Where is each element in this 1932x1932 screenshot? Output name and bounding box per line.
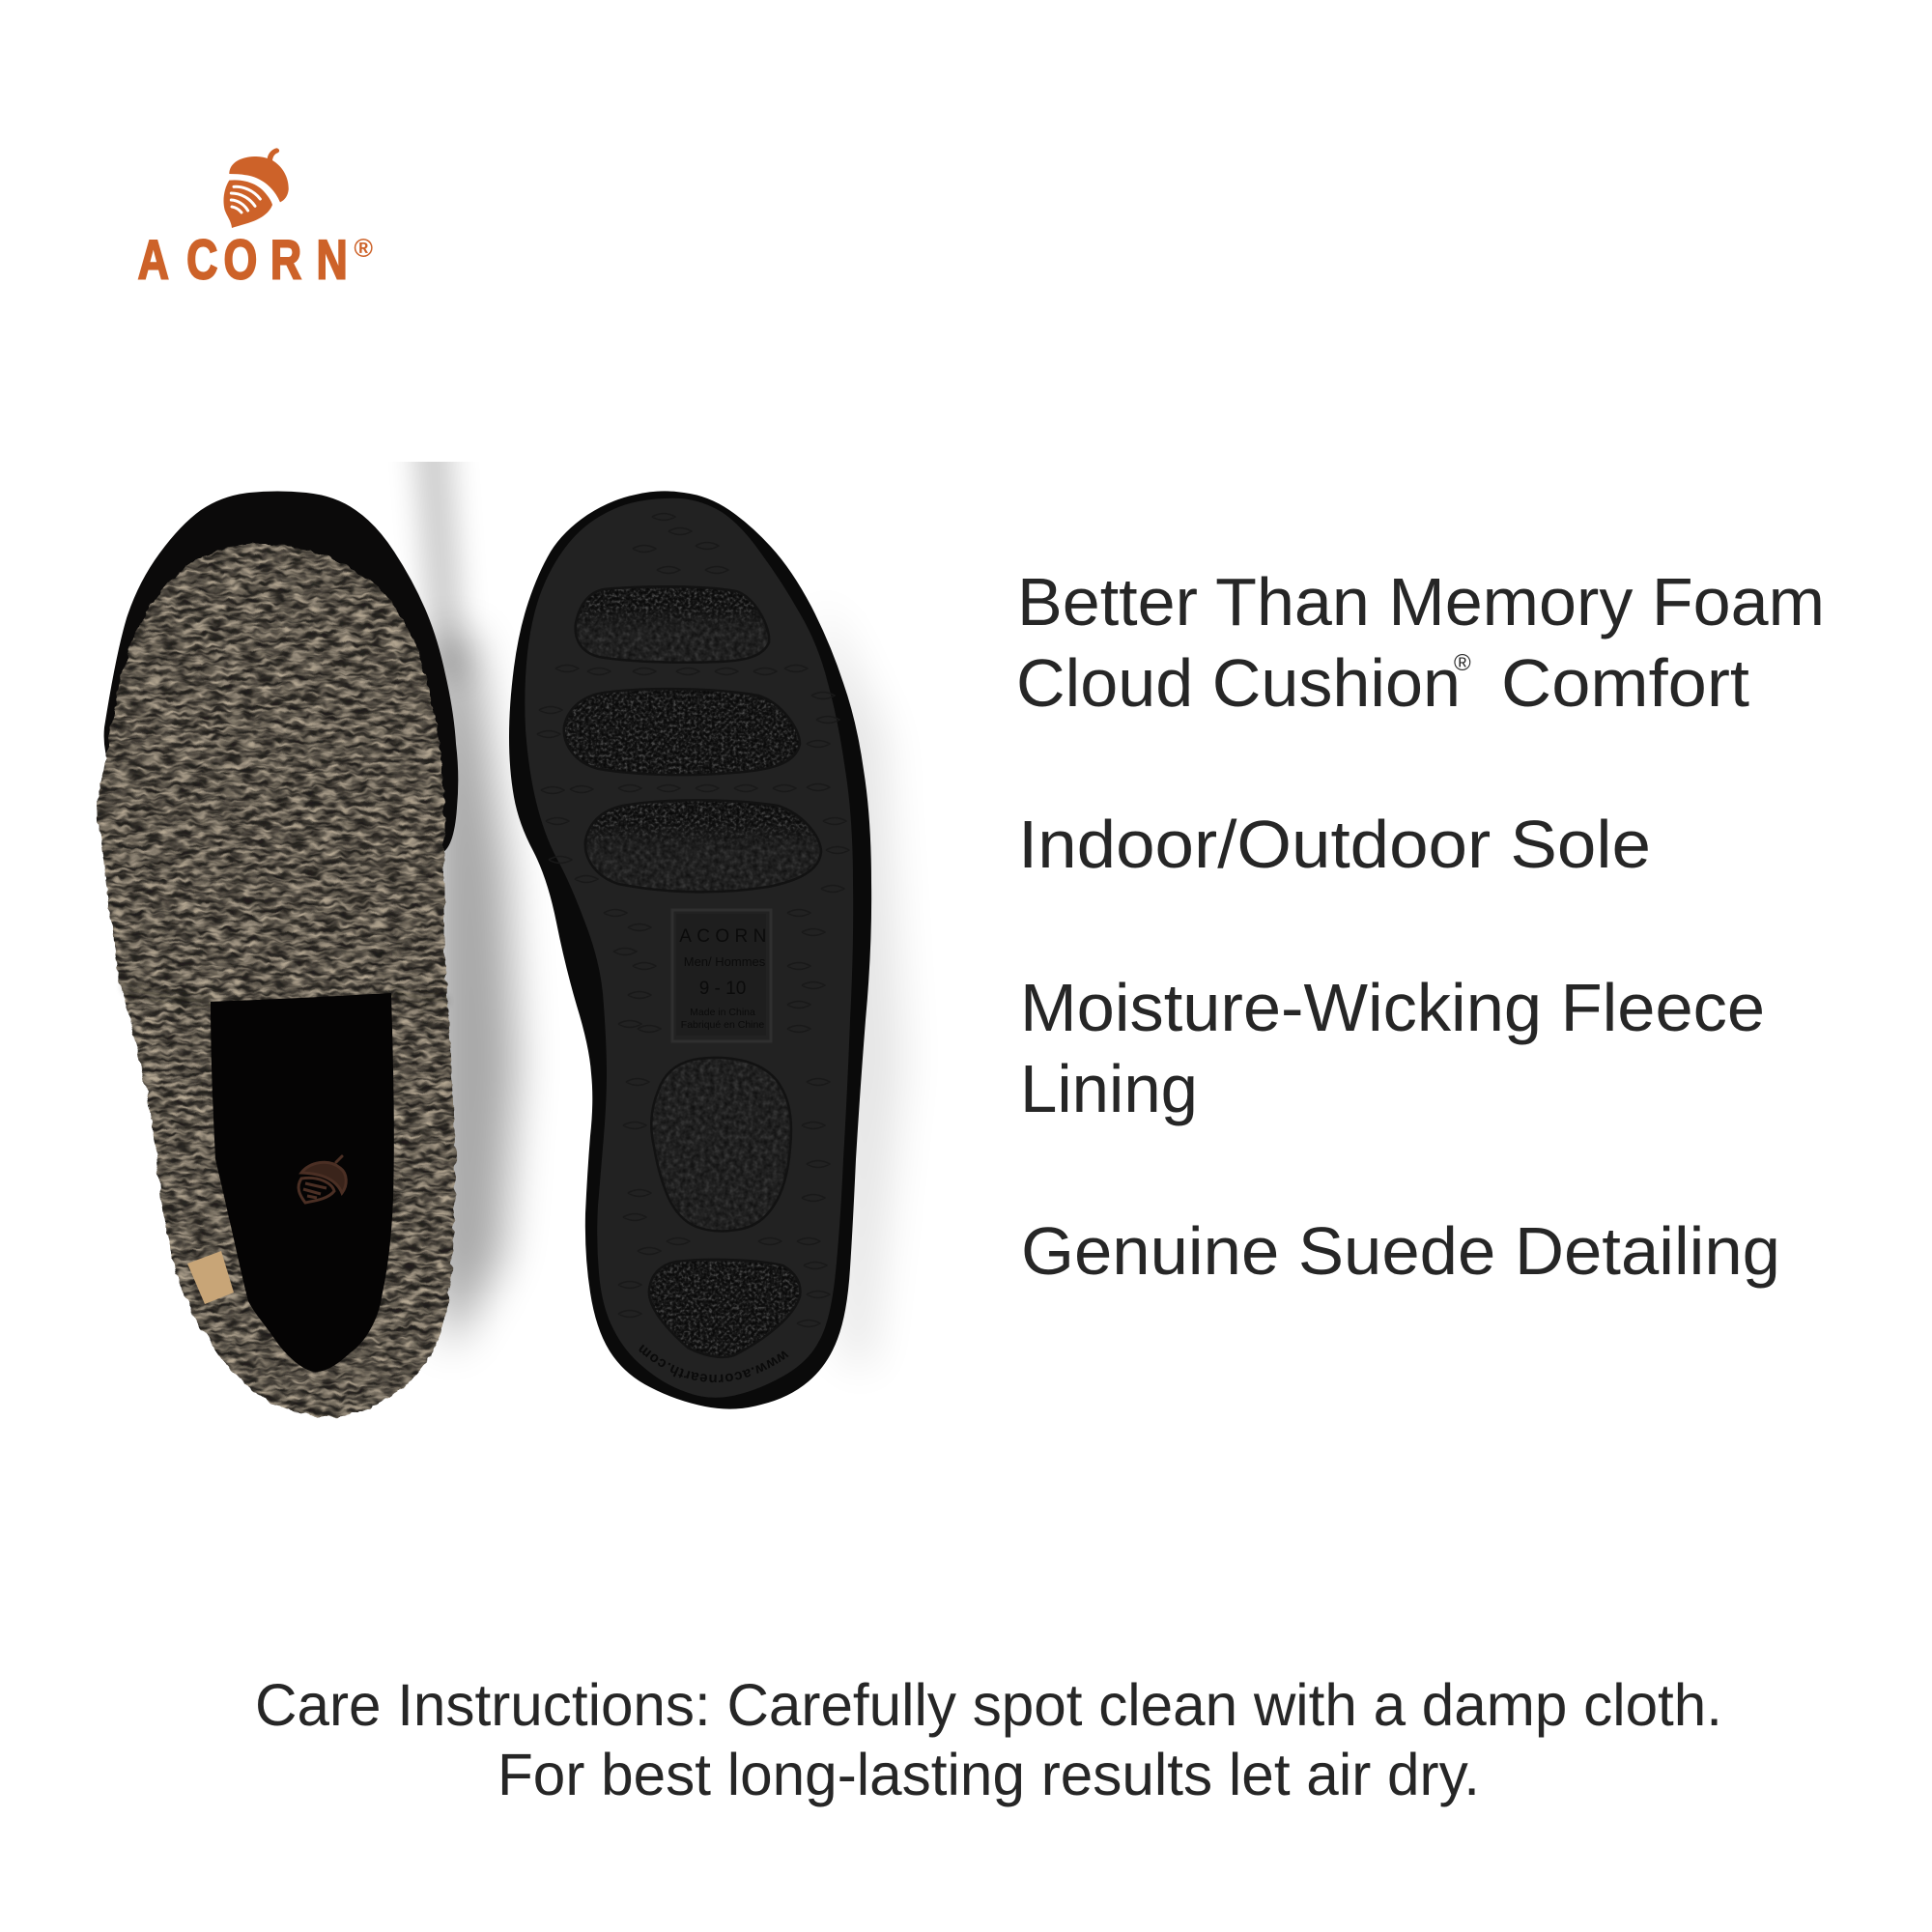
collar fold shading — [124, 987, 447, 1001]
feature: moisture wicking lining — [1020, 970, 1765, 1126]
logo: Acorn brand — [138, 148, 373, 291]
feature line: better than memory foam: Better Than Memory Foam — [1017, 564, 1825, 639]
size label panel — [672, 910, 772, 1041]
suede toe rim — [104, 491, 458, 869]
feature: moisture wicking lining: Lining — [1020, 1051, 1198, 1126]
knit upper — [87, 531, 473, 1430]
icon: acorn — [223, 148, 289, 228]
inner lining opening — [211, 993, 394, 1372]
suede heel tab — [187, 1251, 234, 1304]
feature line: cloud cushion comfort: ® — [1454, 650, 1471, 676]
label text: size range: 9 - 10 — [699, 979, 746, 999]
feature line: cloud cushion comfort — [1016, 645, 1749, 721]
care instructions: For best long-lasting results let air dry. — [497, 1742, 1480, 1807]
label text: origin: Made in China — [690, 1007, 755, 1018]
rubber sole — [525, 498, 853, 1398]
feature: genuine suede detailing: Genuine Suede Detailing — [1021, 1213, 1780, 1289]
care instructions — [255, 1672, 1722, 1807]
pad outlines — [564, 586, 821, 1357]
molded website address: www.acornearth.com — [639, 1345, 788, 1382]
label text: size: Men/ Hommes — [684, 954, 766, 969]
embroidered acorn — [298, 1156, 346, 1203]
feature: memory foam comfort — [1016, 564, 1825, 721]
feature line: cloud cushion comfort: Comfort — [1501, 645, 1749, 721]
care instructions: Care Instructions: Carefully spot clean with a damp cloth. — [255, 1672, 1722, 1738]
feature line: cloud cushion comfort: Cloud Cushion — [1016, 645, 1461, 721]
shoe shadows — [415, 425, 903, 1372]
suede outer rim — [509, 491, 871, 1409]
label text: origin French: Fabriqué en Chine — [681, 1019, 764, 1031]
feature: indoor outdoor sole: Indoor/Outdoor Sole — [1018, 807, 1651, 882]
left shoe: top view — [87, 491, 473, 1430]
mid-texture grip pads — [577, 616, 817, 1230]
embossed leaf tread pattern — [537, 514, 849, 1327]
dark speckled grip pads — [560, 676, 811, 1362]
wordmark: ACORN — [138, 228, 348, 291]
feature: moisture wicking lining: Moisture-Wicking Fleece — [1020, 970, 1765, 1045]
registered mark: ® — [354, 234, 373, 263]
label text: brand: ACORN — [679, 926, 772, 947]
right shoe: sole view — [509, 491, 871, 1409]
dark speckled tops of pads one and three — [578, 587, 816, 844]
